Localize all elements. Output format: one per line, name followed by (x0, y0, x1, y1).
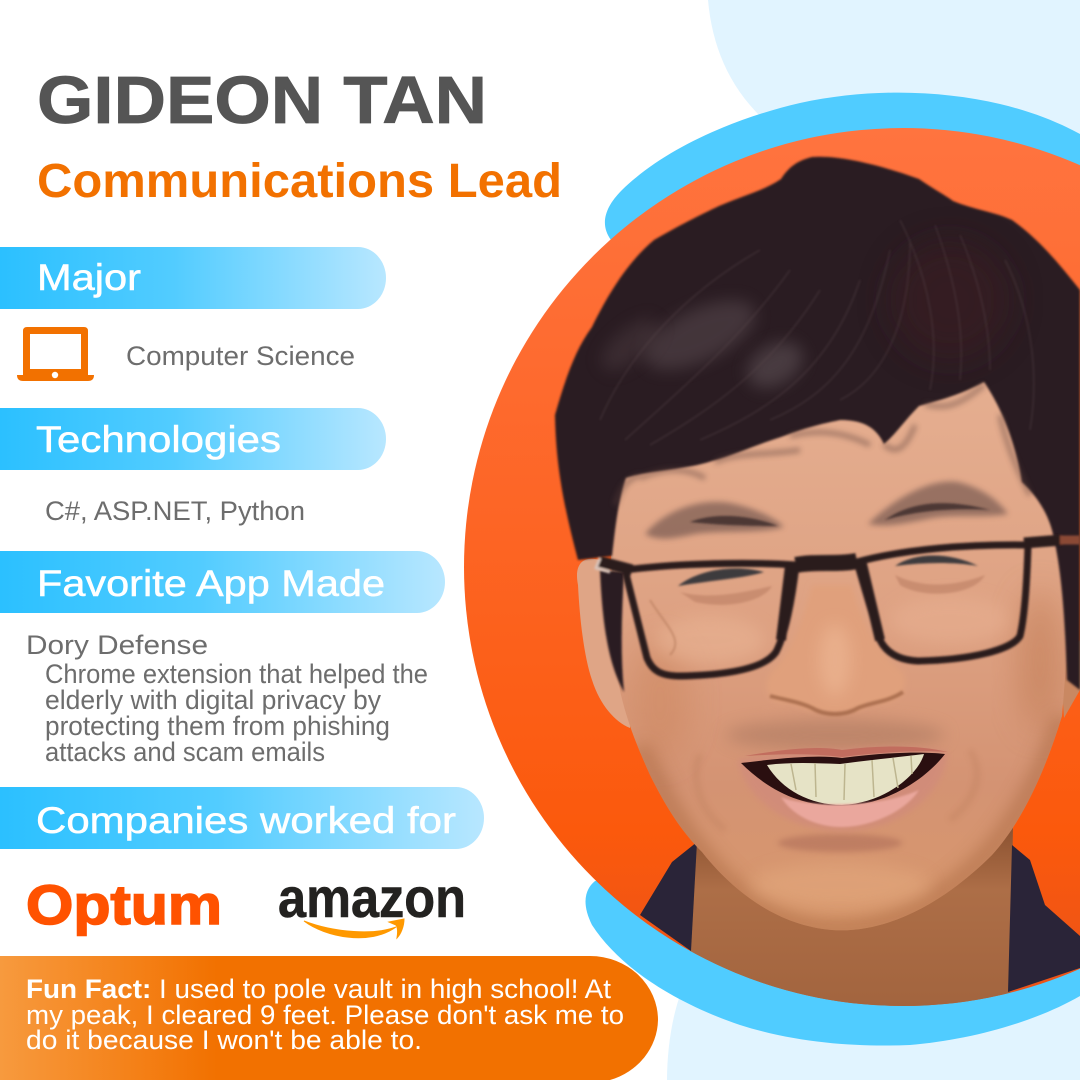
logo: amazon: amazon (278, 866, 466, 929)
fun fact background (0, 956, 658, 1080)
glasses (596, 540, 1080, 676)
section: major (0, 247, 386, 381)
nose (767, 585, 905, 714)
background: light blue top blob (708, 0, 1080, 135)
app name: Dory Defense (26, 630, 208, 660)
eyebrows (645, 481, 1008, 539)
left ear (577, 558, 630, 728)
shirt collar left (640, 842, 697, 951)
major heading: Major (37, 257, 141, 298)
section: technologies (0, 408, 386, 526)
app description: Chrome extension that helped the (45, 659, 428, 689)
fun fact panel: do it because I won't be able to. (26, 1025, 422, 1055)
app description: protecting them from phishing (45, 711, 390, 741)
shirt collar right (1008, 845, 1080, 992)
section: companies (0, 787, 484, 938)
section: favorite app (0, 551, 445, 767)
fun fact panel (0, 956, 658, 1080)
app description: attacks and scam emails (45, 737, 325, 767)
eyes (650, 556, 985, 655)
companies heading: Companies worked for (36, 800, 456, 841)
major header pill (0, 247, 386, 309)
favorite app heading: Favorite App Made (37, 563, 385, 604)
fun fact panel: my peak, I cleared 9 feet. Please don't ask me to (26, 1000, 624, 1030)
favorite app header pill (0, 551, 445, 613)
background: light blue bottom blob (667, 980, 1080, 1080)
app description: elderly with digital privacy by (45, 685, 381, 715)
logo: optum: Optum (26, 873, 222, 936)
fun fact text: Fun Fact: I used to pole vault in high school! At (26, 974, 612, 1004)
technologies value: C#, ASP.NET, Python (45, 496, 305, 526)
face (610, 350, 1068, 930)
technologies header pill (0, 408, 386, 470)
companies header pill (0, 787, 484, 849)
blue crescent: top (605, 93, 1080, 240)
title: name: GIDEON TAN (37, 63, 487, 138)
technologies heading: Technologies (36, 419, 281, 460)
hair (555, 157, 1080, 692)
blue crescent: bottom (586, 850, 1080, 1046)
face shading (630, 590, 1062, 930)
amazon smile (304, 919, 404, 938)
title: role: Communications Lead (37, 155, 562, 208)
major value: Computer Science (126, 341, 355, 371)
portrait photo illustration (460, 120, 1080, 1010)
right ear (1063, 640, 1080, 718)
app description (45, 659, 428, 767)
icon: laptop (17, 327, 94, 381)
neck (690, 825, 1013, 1010)
mouth (738, 746, 948, 831)
portrait background (460, 120, 1080, 1010)
